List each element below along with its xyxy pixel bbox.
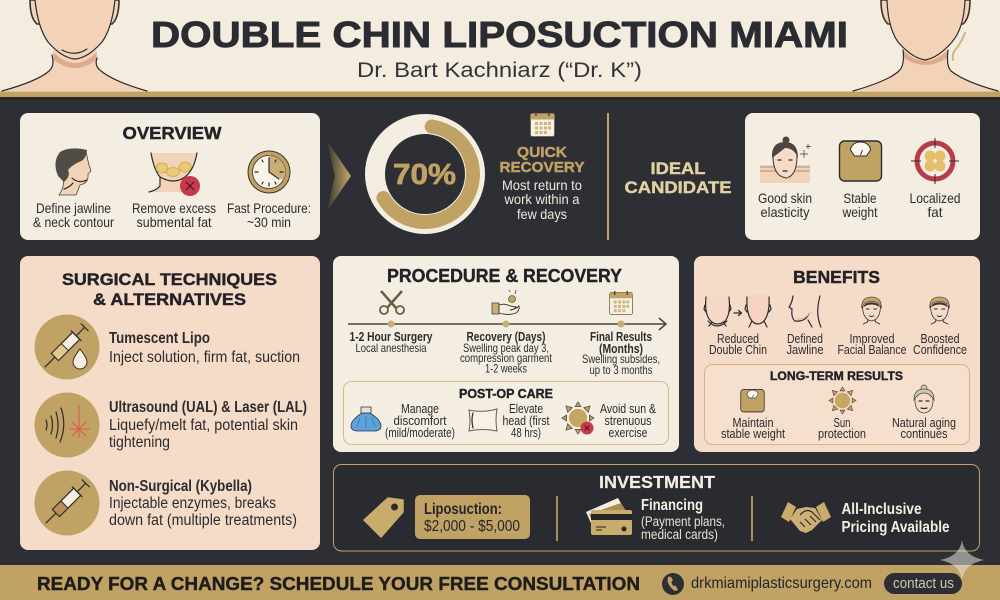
text: localized fat: Localized (910, 190, 960, 206)
text: quick recovery: Most return to (502, 177, 582, 193)
icon: sun protection (829, 387, 856, 414)
text: elevate head: head (first (502, 414, 550, 428)
text: define jawline: & neck contour (33, 214, 114, 230)
text: financing: (Payment plans, (641, 514, 725, 529)
text: improved facial balance: Facial Balance (838, 343, 907, 357)
text: good skin elasticity: elasticity (760, 204, 810, 220)
icon: tumescent syringe (34, 314, 100, 380)
icon: price tag (364, 498, 403, 537)
panel: overview (20, 113, 320, 240)
text: final results step: Final Results (590, 329, 652, 344)
text: good skin elasticity (758, 190, 812, 220)
text: all-inclusive pricing (842, 501, 950, 536)
text: boosted confidence: Boosted (920, 332, 960, 346)
text: ultrasound and laser: tightening (109, 434, 170, 451)
text: quick recovery: few days (517, 206, 567, 222)
text: fast procedure (227, 200, 311, 230)
text: reduced double chin (709, 332, 767, 357)
icon: jawline profile (55, 148, 91, 195)
text: final results step: Swelling subsides, (582, 352, 660, 366)
header (0, 0, 1000, 100)
text: manage discomfort (385, 402, 455, 440)
text: recovery step: Swelling peak day 3, (463, 341, 549, 355)
text: good skin elasticity: Good skin (758, 190, 812, 206)
text: improved facial balance (838, 332, 907, 357)
text: reduced double chin: Double Chin (709, 343, 767, 357)
icon: clock (248, 151, 290, 193)
title: DOUBLE CHIN LIPOSUCTION MIAMI (151, 14, 848, 55)
text: financing (641, 497, 725, 542)
heading: ideal candidate: CANDIDATE (624, 178, 732, 197)
price box (415, 495, 530, 539)
text: quick recovery: work within a (504, 191, 580, 207)
text: ultrasound and laser: Ultrasound (UAL) & Laser (LAL) (109, 399, 307, 416)
icon: good skin (760, 136, 811, 183)
subtitle: Dr. Bart Kachniarz (“Dr. K”) (357, 59, 642, 82)
heading: surgical techniques: SURGICAL TECHNIQUES (62, 271, 277, 289)
sub-panel: long-term results (704, 364, 970, 444)
text: fast procedure: Fast Procedure: (227, 200, 311, 216)
icon: boosted confidence (930, 297, 949, 324)
heading: long-term results: LONG-TERM RESULTS (770, 369, 903, 383)
price box: $2,000 - $5,000 (424, 518, 520, 535)
icon: improved facial balance (862, 297, 881, 324)
icon: avoid sun (562, 402, 594, 434)
text: maintain stable weight (721, 416, 785, 441)
illustration: right face (853, 0, 998, 91)
text: natural aging: continues (900, 427, 948, 441)
text: non-surgical kybella: Injectable enzymes, breaks (109, 495, 276, 512)
text: elevate head: Elevate (509, 402, 543, 416)
text: recovery step: 1-2 weeks (485, 362, 527, 376)
heading: benefits: BENEFITS (793, 267, 880, 287)
text: non-surgical kybella: Non-Surgical (Kybella) (109, 478, 252, 495)
text: remove excess fat: Remove excess (132, 200, 216, 216)
text: non-surgical kybella: down fat (multiple treatments) (109, 512, 297, 529)
text: elevate head (502, 402, 550, 440)
text: tumescent lipo: Tumescent Lipo (109, 330, 210, 347)
panel: investment (334, 464, 980, 551)
text: all-inclusive pricing: All-Inclusive (842, 501, 922, 518)
text: defined jawline: Jawline (786, 343, 824, 357)
icon: reduced double chin (704, 294, 771, 327)
text: final results step (582, 329, 660, 377)
text: tumescent lipo: Inject solution, firm fat, suction (109, 349, 300, 366)
footer bar (0, 565, 1000, 600)
illustration: left face (0, 0, 148, 91)
text: define jawline (33, 200, 114, 230)
text: natural aging (892, 416, 956, 441)
heading: procedure and recovery: PROCEDURE & RECOVERY (387, 266, 622, 286)
icon: hand with pill (492, 290, 519, 314)
heading: surgical techniques: & ALTERNATIVES (93, 291, 246, 309)
icon: bathroom scale (840, 141, 882, 181)
icon: natural aging face (914, 385, 934, 413)
text: stable weight: Stable (844, 190, 877, 206)
watermark: sparkle (940, 540, 984, 580)
text: final results step: (Months) (599, 341, 643, 356)
text: avoid sun and exercise: strenuous (604, 414, 652, 428)
timeline arrow (348, 318, 666, 330)
icon: ultrasound and laser (34, 392, 100, 458)
icon: defined jawline (789, 296, 821, 327)
heading: overview: OVERVIEW (122, 123, 222, 143)
text: avoid sun and exercise: exercise (608, 426, 648, 440)
text: natural aging: Natural aging (892, 416, 956, 430)
text: recovery step: compression garment (460, 351, 553, 365)
icon: maintain weight scale (741, 390, 764, 412)
panel: benefits (694, 256, 980, 452)
text: ultrasound and laser (109, 399, 307, 451)
text: defined jawline: Defined (787, 332, 823, 346)
website: drkmiamiplasticsurgery.com (691, 575, 872, 592)
text: quick recovery: QUICK (517, 144, 567, 161)
panel: ideal candidate (745, 113, 980, 240)
text: surgery step: Local anesthesia (356, 341, 427, 355)
call to action: READY FOR A CHANGE? SCHEDULE YOUR FREE CONSULTATION (37, 573, 640, 594)
chart: 70 percent donut (375, 124, 475, 224)
sub-panel: post-op care (344, 382, 668, 444)
text: surgery step: 1-2 Hour Surgery (350, 329, 433, 344)
text: reduced double chin: Reduced (717, 332, 759, 346)
icon: scissors (380, 291, 404, 314)
heading: ideal candidate: IDEAL (650, 159, 706, 178)
text: sun protection: protection (818, 427, 866, 441)
text: recovery step: Recovery (Days) (466, 329, 546, 344)
text: quick recovery: RECOVERY (500, 159, 584, 176)
icon: calendar final results (609, 291, 633, 315)
heading: post-op care: POST-OP CARE (459, 386, 553, 401)
icon: target on fat (911, 138, 959, 184)
text: localized fat (910, 190, 960, 220)
text: stable weight (842, 190, 878, 220)
icon: payment cards (586, 498, 632, 535)
text: remove excess fat: submental fat (136, 214, 212, 230)
donut value: 70% (393, 159, 456, 191)
text: elevate head: 48 hrs) (511, 426, 541, 440)
panel: procedure and recovery (333, 256, 679, 452)
icon: calendar (530, 112, 554, 136)
text: fast procedure: ~30 min (247, 214, 291, 230)
text: improved facial balance: Improved (850, 332, 895, 346)
text: tumescent lipo (109, 330, 300, 366)
button: contact us: contact us (893, 575, 954, 592)
text: financing: medical cards) (641, 527, 718, 542)
text: avoid sun and exercise: Avoid sun & (600, 402, 657, 416)
text: sun protection (818, 416, 866, 441)
text: final results step: up to 3 months (590, 363, 652, 377)
text: ultrasound and laser: Liquefy/melt fat, potential skin (109, 417, 298, 434)
text: maintain stable weight: Maintain (732, 416, 774, 430)
text: all-inclusive pricing: Pricing Available (842, 519, 950, 536)
text: avoid sun and exercise (600, 402, 657, 440)
text: manage discomfort: discomfort (394, 414, 447, 428)
text: recovery step (460, 329, 553, 376)
text: boosted confidence (913, 332, 967, 357)
icon: ice bag (351, 407, 381, 431)
text: quick recovery (500, 144, 584, 222)
text: manage discomfort: Manage (401, 402, 439, 416)
icon: kybella syringe (34, 470, 100, 536)
heading: ideal candidate (624, 159, 732, 197)
price box: Liposuction: (424, 501, 502, 518)
icon: submental fat removal (149, 153, 200, 196)
heading: surgical techniques (62, 271, 277, 309)
text: non-surgical kybella (109, 478, 297, 529)
text: boosted confidence: Confidence (913, 343, 967, 357)
text: manage discomfort: (mild/moderate) (385, 426, 455, 440)
text: stable weight: weight (842, 204, 878, 220)
icon: handshake (781, 502, 831, 533)
icon: phone (662, 573, 684, 595)
text: localized fat: fat (928, 204, 943, 220)
panel: surgical techniques (20, 256, 320, 550)
text: maintain stable weight: stable weight (721, 427, 785, 441)
text: remove excess fat (132, 200, 216, 230)
arrow: overview to stat (327, 141, 351, 211)
icon: pillow (469, 409, 497, 431)
text: financing: Financing (641, 497, 703, 514)
text: define jawline: Define jawline (36, 200, 111, 216)
text: sun protection: Sun (834, 416, 851, 430)
heading: investment: INVESTMENT (599, 472, 715, 492)
text: defined jawline (786, 332, 824, 357)
text: surgery step (350, 329, 433, 355)
